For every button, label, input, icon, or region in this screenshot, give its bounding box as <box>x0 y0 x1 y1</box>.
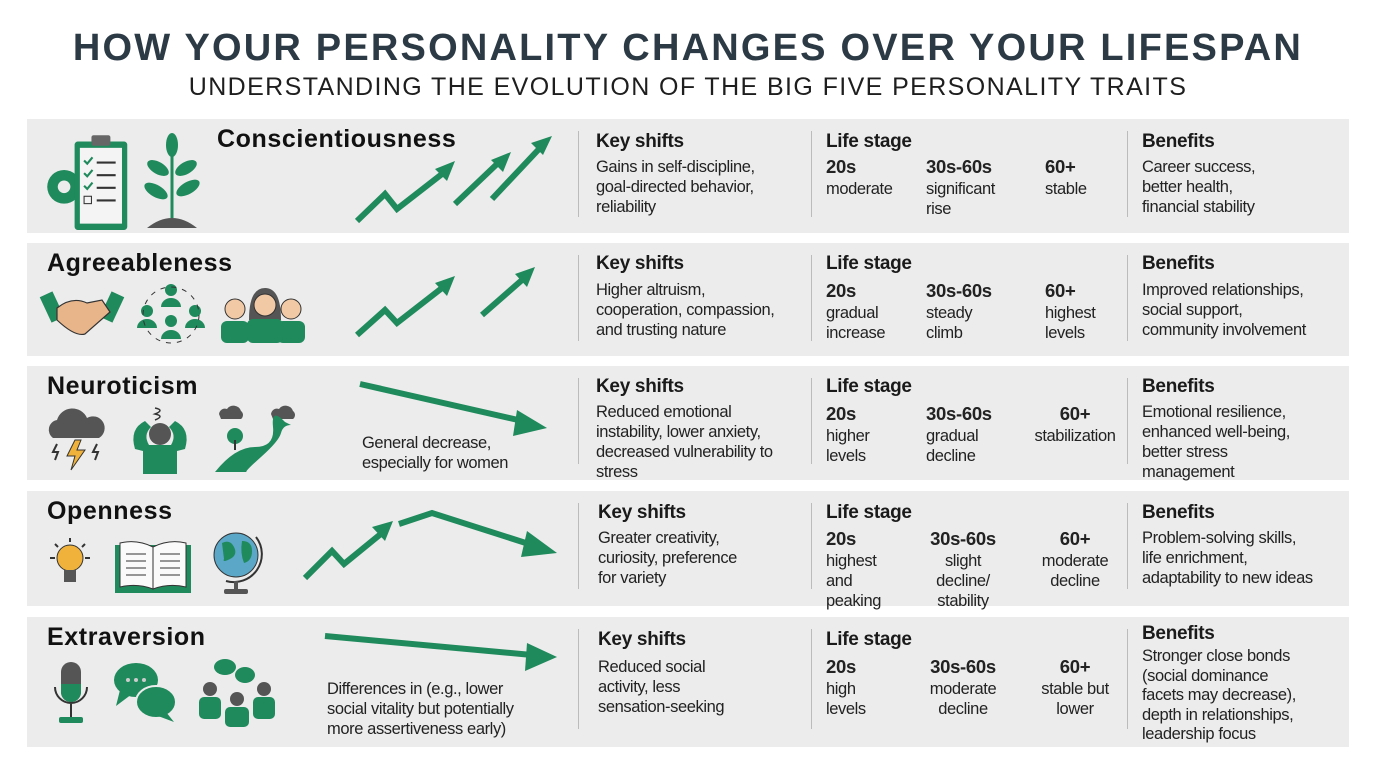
panel: openness: Problem-solving skills, <box>1142 529 1296 547</box>
panel: agreeableness: highest <box>1045 304 1095 322</box>
panel: extraversion: high <box>826 680 856 698</box>
icon: storm cloud <box>48 408 105 470</box>
panel: openness: Key shifts <box>598 502 686 523</box>
panel: openness: 60+ <box>1060 528 1090 549</box>
panel: extraversion: Reduced social <box>598 658 705 676</box>
panel: extraversion: levels <box>826 700 866 718</box>
panel: agreeableness: Higher altruism, <box>596 281 705 299</box>
text: trend note: General decrease, <box>362 434 491 452</box>
panel: agreeableness: Key shifts <box>596 253 684 274</box>
text: key shifts: Key shifts <box>596 131 684 152</box>
text: trend note <box>327 680 514 738</box>
icon: plant <box>144 133 200 228</box>
panel: extraversion <box>27 617 1349 747</box>
panel: openness: slight <box>945 552 981 570</box>
panel: conscientiousness: 20s <box>826 156 856 177</box>
icon: stressed person <box>133 407 187 474</box>
panel: openness: adaptability to new ideas <box>1142 569 1313 587</box>
panel: agreeableness <box>27 243 1349 356</box>
panel: conscientiousness: moderate <box>826 180 893 198</box>
panel: agreeableness: climb <box>926 324 963 342</box>
panel: extraversion: leadership focus <box>1142 725 1256 743</box>
panel: openness: stability <box>937 592 989 610</box>
panel: conscientiousness: 60+ <box>1045 156 1075 177</box>
panel: neuroticism: decreased vulnerability to <box>596 443 773 461</box>
panel: extraversion: lower <box>1056 700 1094 718</box>
text: trend note <box>362 434 508 472</box>
panel: extraversion: decline <box>938 700 988 718</box>
panel: openness: moderate <box>1042 552 1108 570</box>
panel: agreeableness: increase <box>826 324 885 342</box>
subtitle: UNDERSTANDING THE EVOLUTION OF THE BIG FIVE PERSONALITY TRAITS <box>189 73 1187 101</box>
panel: openness: curiosity, preference <box>598 549 737 567</box>
panel: conscientiousness: reliability <box>596 198 656 216</box>
panel: conscientiousness: Career success, <box>1142 158 1255 176</box>
icon: clipboard and gear <box>47 135 128 230</box>
text: trend note: especially for women <box>362 454 508 472</box>
panel: agreeableness: levels <box>1045 324 1085 342</box>
icon: group talk <box>199 659 275 727</box>
arrow: decreasing <box>324 633 557 671</box>
panel: conscientiousness: goal-directed behavior, <box>596 178 754 196</box>
panel: extraversion: stable but <box>1041 680 1109 698</box>
panel: extraversion: (social dominance <box>1142 666 1268 684</box>
arrow: rising <box>355 136 552 224</box>
panel: extraversion: moderate <box>930 680 996 698</box>
panel: agreeableness: Benefits <box>1142 253 1215 274</box>
panel: openness: for variety <box>598 569 666 587</box>
panel: conscientiousness <box>27 119 1349 233</box>
panel: extraversion: Key shifts <box>598 629 686 650</box>
panel: conscientiousness: 30s-60s <box>926 156 992 177</box>
text: benefits: Benefits <box>1142 131 1215 152</box>
icon: book <box>115 541 191 593</box>
panel: neuroticism: Reduced emotional <box>596 403 731 421</box>
icon: chat bubbles <box>114 663 175 722</box>
panel: agreeableness: Life stage <box>826 253 912 274</box>
panel: extraversion: Life stage <box>826 629 912 650</box>
panel: agreeableness: steady <box>926 304 972 322</box>
panel: neuroticism: Life stage <box>826 376 912 397</box>
panel: agreeableness: Improved relationships, <box>1142 281 1303 299</box>
panel: extraversion: Benefits <box>1142 623 1215 644</box>
panel: neuroticism: gradual <box>926 427 978 445</box>
panel: extraversion: facets may decrease), <box>1142 686 1296 704</box>
panel: agreeableness: 20s <box>826 280 856 301</box>
panel: agreeableness: social support, <box>1142 301 1242 319</box>
text: life stage: Life stage <box>826 131 912 152</box>
panel: conscientiousness: Gains in self-discipline, <box>596 158 755 176</box>
panel: openness <box>27 491 1349 606</box>
panel: openness: Openness <box>47 497 173 525</box>
heading: Conscientiousness <box>217 125 456 153</box>
panel: conscientiousness: significant <box>926 180 995 198</box>
panel: openness: Life stage <box>826 502 912 523</box>
panel: extraversion: depth in relationships, <box>1142 706 1293 724</box>
icon: group circle <box>137 284 205 344</box>
icon: road <box>215 406 295 472</box>
icon: microphone <box>54 662 88 723</box>
panel: neuroticism: instability, lower anxiety, <box>596 423 761 441</box>
panel: extraversion: Stronger close bonds <box>1142 647 1290 665</box>
panel: neuroticism: better stress <box>1142 443 1228 461</box>
panel: neuroticism: levels <box>826 447 866 465</box>
panel: neuroticism: stabilization <box>1034 427 1116 445</box>
panel: agreeableness: community involvement <box>1142 321 1306 339</box>
panel: extraversion: 60+ <box>1060 656 1090 677</box>
text: trend note: more assertiveness early) <box>327 720 506 738</box>
panel: openness: 30s-60s <box>930 528 996 549</box>
panel: neuroticism: Key shifts <box>596 376 684 397</box>
panel: openness: Benefits <box>1142 502 1215 523</box>
panel: openness: highest <box>826 552 876 570</box>
panel: extraversion: 20s <box>826 656 856 677</box>
panel: agreeableness: Agreeableness <box>47 249 233 277</box>
panel: extraversion: Extraversion <box>47 623 206 651</box>
icon: people <box>221 288 305 343</box>
panel: neuroticism: 20s <box>826 403 856 424</box>
panel: neuroticism: Benefits <box>1142 376 1215 397</box>
icon: light bulb <box>50 538 90 582</box>
panel: conscientiousness: better health, <box>1142 178 1233 196</box>
panel: neuroticism: higher <box>826 427 869 445</box>
icon: globe <box>214 532 263 594</box>
panel: neuroticism: Emotional resilience, <box>1142 403 1286 421</box>
title: HOW YOUR PERSONALITY CHANGES OVER YOUR LIFESPAN <box>73 27 1303 69</box>
panel: openness: life enrichment, <box>1142 549 1247 567</box>
panel: agreeableness: gradual <box>826 304 878 322</box>
text: trend note: social vitality but potentially <box>327 700 514 718</box>
panel: conscientiousness: financial stability <box>1142 198 1255 216</box>
panel: conscientiousness: stable <box>1045 180 1087 198</box>
arrow: rise then decline <box>302 510 557 580</box>
panel: agreeableness: 60+ <box>1045 280 1075 301</box>
panel: neuroticism: decline <box>926 447 976 465</box>
panel: neuroticism: 30s-60s <box>926 403 992 424</box>
panel: openness: peaking <box>826 592 881 610</box>
panel: extraversion: sensation-seeking <box>598 698 724 716</box>
panel: neuroticism: stress <box>596 463 638 481</box>
panel: openness: 20s <box>826 528 856 549</box>
panel: neuroticism: Neuroticism <box>47 372 198 400</box>
panel: conscientiousness: rise <box>926 200 951 218</box>
panel: neuroticism: enhanced well-being, <box>1142 423 1290 441</box>
text: trend note: Differences in (e.g., lower <box>327 680 503 698</box>
icon: handshake <box>40 291 124 335</box>
arrow: rising <box>355 267 535 338</box>
panel: neuroticism: 60+ <box>1060 403 1090 424</box>
panel: extraversion: activity, less <box>598 678 680 696</box>
panel: agreeableness: and trusting nature <box>596 321 726 339</box>
arrow: decreasing <box>359 381 547 436</box>
panel: agreeableness: 30s-60s <box>926 280 992 301</box>
panel: neuroticism: management <box>1142 463 1234 481</box>
panel: agreeableness: cooperation, compassion, <box>596 301 774 319</box>
panel: openness: and <box>826 572 852 590</box>
panel: neuroticism <box>27 366 1349 480</box>
panel: openness: Greater creativity, <box>598 529 719 547</box>
panel: openness: decline <box>1050 572 1100 590</box>
panel: openness: decline/ <box>936 572 990 590</box>
panel: extraversion: 30s-60s <box>930 656 996 677</box>
